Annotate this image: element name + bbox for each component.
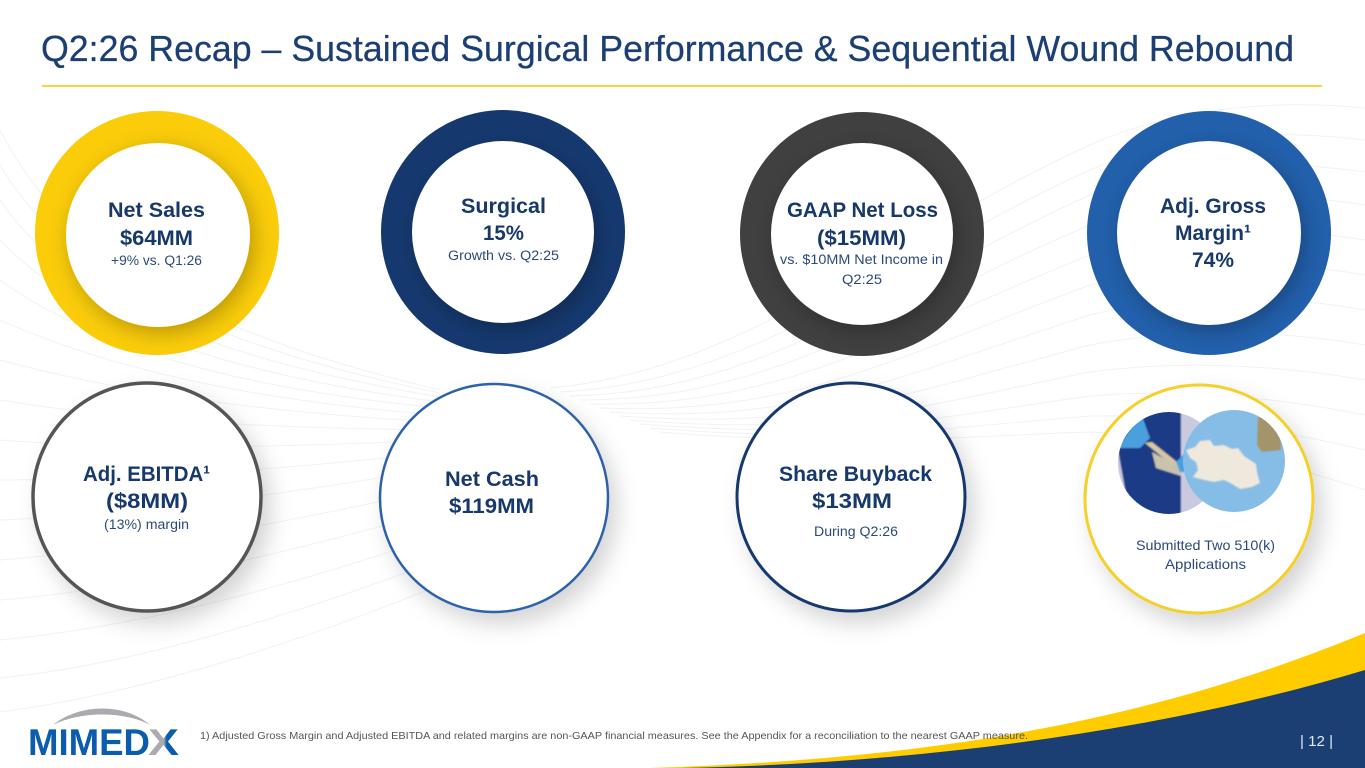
ring: gaap net loss: GAAP Net Loss bbox=[787, 198, 938, 222]
photo: product flakes on blue surface bbox=[1183, 410, 1285, 512]
title underline bbox=[42, 85, 1322, 87]
circle: net cash bbox=[380, 384, 608, 612]
circle: adj ebitda bbox=[33, 383, 261, 611]
bottom wave: navy bbox=[680, 670, 1365, 768]
page number: | 12 | bbox=[1300, 733, 1333, 750]
ring: adj gross margin bbox=[1087, 111, 1331, 355]
ring: surgical bbox=[381, 110, 625, 354]
ring: net sales bbox=[35, 111, 279, 355]
ring: gaap net loss: ($15MM) bbox=[817, 226, 906, 250]
ring: gaap net loss bbox=[740, 112, 984, 356]
circle: 510(k) submissions: Submitted Two 510(k) bbox=[1136, 537, 1275, 553]
logo: mimedx: MIMED bbox=[28, 722, 150, 763]
ring: adj gross margin: Adj. Gross bbox=[1160, 194, 1266, 218]
circle: adj ebitda: Adj. EBITDA¹ bbox=[83, 462, 210, 486]
circle: 510(k) submissions: Applications bbox=[1165, 556, 1246, 572]
ring: gaap net loss: Q2:25 bbox=[842, 272, 882, 287]
logo: mimedx bbox=[28, 708, 179, 763]
circle: 510(k) submissions bbox=[1085, 385, 1313, 613]
circle: share buyback: $13MM bbox=[812, 489, 892, 513]
circle: share buyback: Share Buyback bbox=[779, 462, 932, 486]
footnote: 1) Adjusted Gross Margin and Adjusted EBITDA and related margins are non-GAAP financial measures. See the Appendix for a reconciliation to the nearest GAAP measure. bbox=[200, 730, 1028, 742]
circle: share buyback: During Q2:26 bbox=[814, 524, 898, 539]
logo: mimedx: X bbox=[148, 722, 179, 763]
ring: surgical: 15% bbox=[483, 221, 524, 245]
ring: net sales: Net Sales bbox=[108, 198, 205, 222]
circle: adj ebitda: (13%) margin bbox=[104, 517, 189, 532]
ring: surgical: Growth vs. Q2:25 bbox=[448, 248, 559, 263]
circle: adj ebitda: ($8MM) bbox=[106, 489, 188, 513]
bottom wave: yellow bbox=[650, 633, 1365, 768]
ring: adj gross margin: Margin¹ bbox=[1175, 221, 1251, 245]
photo: surgical use of product bbox=[1118, 412, 1202, 514]
ring: net sales: +9% vs. Q1:26 bbox=[111, 253, 202, 268]
circle: net cash: $119MM bbox=[449, 494, 534, 518]
title: Q2:26 Recap – Sustained Surgical Performance & Sequential Wound Rebound bbox=[41, 28, 1294, 69]
ring: adj gross margin: 74% bbox=[1192, 248, 1234, 272]
ring: surgical: Surgical bbox=[461, 194, 546, 218]
circle: net cash: Net Cash bbox=[445, 467, 539, 491]
ring: gaap net loss: vs. $10MM Net Income in bbox=[780, 252, 943, 267]
circle: share buyback bbox=[737, 383, 965, 611]
ring: net sales: $64MM bbox=[120, 226, 193, 250]
